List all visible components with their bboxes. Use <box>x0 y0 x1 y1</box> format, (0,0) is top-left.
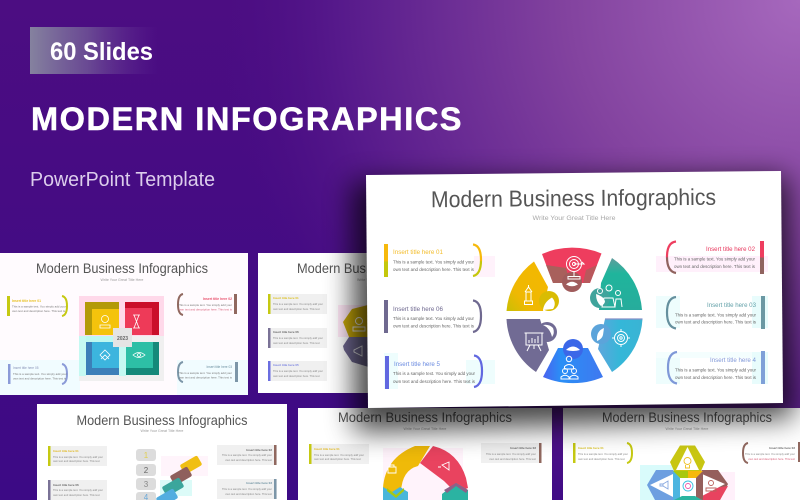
side text items: own text and description here. This text <box>578 457 625 461</box>
item 03: This is a sample text. You simply add your <box>675 312 756 318</box>
text cards <box>48 445 277 500</box>
subheading: PowerPoint Template <box>30 169 215 191</box>
slide thumbnail: quadrant: Modern Business Infographics <box>36 260 208 276</box>
quadrant chart: 2023 <box>117 336 128 342</box>
right item bottom: own text and description here. This text is <box>179 376 233 380</box>
slide thumbnail: numbered list: Write Your Great Title Here <box>141 429 183 433</box>
text cards: This is a sample text. You simply add your <box>53 488 103 492</box>
right item top: This is a sample text. You simply add your <box>178 303 232 307</box>
segment: red <box>542 248 602 292</box>
item 02: own text and description here. This text is <box>674 264 756 270</box>
main slide subtitle: Write Your Great Title Here <box>532 215 616 222</box>
item 05: Insert title here 5 <box>394 361 441 368</box>
left item top: own text and description here. This text is <box>12 309 66 313</box>
numbered steps <box>136 449 156 500</box>
slide thumbnail: numbered list <box>37 404 287 500</box>
gray text cards: This is a sample text. You simply add your <box>273 369 323 373</box>
slide thumbnail: hexagon <box>258 253 469 393</box>
gray text cards: own text and description here. This text <box>273 307 320 311</box>
badge: 60 slides <box>30 27 158 74</box>
numbered steps: 1 <box>144 451 149 460</box>
text cards: Insert title here 06 <box>53 483 79 487</box>
slide thumbnail: quadrant: Write Your Great Title Here <box>101 278 143 282</box>
item 04 <box>656 351 768 384</box>
text cards: own text and description here. This text <box>314 457 361 461</box>
text cards: own text and description here. This text <box>53 493 100 497</box>
item 06: own text and description here. This text is <box>393 324 475 330</box>
side text items: This is a sample text. You simply add your <box>745 452 795 456</box>
gray text cards: Insert title here 06 <box>273 330 299 334</box>
item 03 <box>656 296 768 329</box>
slide thumbnail: ring <box>298 408 552 500</box>
item 03: own text and description here. This text is <box>675 320 757 326</box>
numbered steps: 3 <box>144 480 149 489</box>
slide thumbnail: numbered list: Modern Business Infographics <box>76 412 248 428</box>
text cards: This is a sample text. You simply add your <box>314 453 364 457</box>
slide thumbnail: honeycomb <box>563 408 800 500</box>
right item top: own text and description here. This text is <box>179 308 233 312</box>
tilted tiles <box>156 455 208 500</box>
item 03: Insert title here 03 <box>707 302 757 309</box>
left item top: Insert title here 01 <box>12 299 41 303</box>
text cards: Insert title here 02 <box>246 448 272 452</box>
side text items: Insert title here 01 <box>578 446 604 450</box>
right item bottom: This is a sample text. You simply add your <box>178 371 232 375</box>
gray text cards: own text and description here. This text <box>273 374 320 378</box>
main slide <box>366 171 783 408</box>
item 02: Insert title here 02 <box>706 246 756 253</box>
text cards <box>309 443 542 464</box>
ring segments <box>383 446 468 500</box>
hexagon cluster <box>640 446 735 500</box>
slide thumbnail: hexagon: Modern Business Infographics <box>297 260 469 276</box>
item 01: own text and description here. This text is <box>393 267 475 273</box>
circular diagram <box>506 248 642 383</box>
segment: teal <box>590 258 642 310</box>
side text items: This is a sample text. You simply add your <box>578 452 628 456</box>
left item top: This is a sample text. You simply add your <box>12 304 66 308</box>
numbered steps: 2 <box>144 466 149 475</box>
item 05: This is a sample text. You simply add your <box>393 371 475 377</box>
text cards: This is a sample text. You simply add your <box>222 487 272 491</box>
heading: MODERN INFOGRAPHICS <box>31 101 463 137</box>
segment: cyan <box>591 319 642 372</box>
right item bottom: Insert title here 03 <box>206 365 232 369</box>
main slide shadow <box>352 176 794 432</box>
item 06: This is a sample text. You simply add your <box>393 316 474 322</box>
item 04: This is a sample text. You simply add your <box>675 368 756 374</box>
left item bottom: Insert title here 05 <box>13 366 39 370</box>
item 05: own text and description here. This text is <box>393 379 476 385</box>
slide thumbnail: ring: Modern Business Infographics <box>338 409 512 425</box>
text cards: own text and description here. This text <box>225 492 272 496</box>
text cards: Insert title here 01 <box>53 449 79 453</box>
hexagon segments <box>338 304 372 368</box>
slide thumbnail: ring: Write Your Great Title Here <box>404 427 446 431</box>
quadrant chart <box>79 296 164 381</box>
side text items: Insert title here 02 <box>769 446 795 450</box>
item 01 <box>384 244 495 277</box>
item 01: Insert title here 01 <box>393 249 444 256</box>
item 02: This is a sample text. You simply add your <box>674 256 755 262</box>
side text items: own text and description here. This text <box>748 457 795 461</box>
gray text cards: This is a sample text. You simply add your <box>273 336 323 340</box>
gray text cards: This is a sample text. You simply add your <box>273 302 323 306</box>
left item bottom: This is a sample text. You simply add your <box>13 372 67 376</box>
right item top <box>178 294 237 315</box>
gray text cards: own text and description here. This text <box>273 341 320 345</box>
item 05 <box>384 353 495 389</box>
text cards: own text and description here. This text <box>489 457 536 461</box>
right item bottom <box>177 360 248 395</box>
text cards: Insert title here 01 <box>314 447 340 451</box>
item 04: own text and description here. This text is <box>675 375 757 381</box>
gray text cards: Insert title here 05 <box>273 363 299 367</box>
left item bottom <box>0 360 80 395</box>
item 06: Insert title here 06 <box>393 306 444 313</box>
text cards: own text and description here. This text <box>53 459 100 463</box>
item 02 <box>656 241 768 274</box>
badge: 60 slides: 60 Slides <box>50 38 153 66</box>
text cards: This is a sample text. You simply add your <box>53 455 103 459</box>
slide thumbnail: hexagon: Write Your <box>357 278 374 282</box>
gray text cards: Insert title here 01 <box>273 296 299 300</box>
text cards: Insert title here 02 <box>510 446 536 450</box>
slide thumbnail: quadrant <box>0 253 248 395</box>
text cards: This is a sample text. You simply add your <box>486 452 536 456</box>
item 04: Insert title here 4 <box>710 357 757 364</box>
right item top: Insert title here 02 <box>203 297 232 301</box>
left item bottom: own text and description here. This text is <box>13 376 67 380</box>
segment: yellow <box>506 262 559 311</box>
text cards: Insert title here 03 <box>246 481 272 485</box>
slide thumbnail: honeycomb: Modern Business Infographics <box>602 409 772 425</box>
item 01: This is a sample text. You simply add your <box>393 260 474 266</box>
slide thumbnail: honeycomb: Write Your Great Title Here <box>666 427 708 431</box>
text cards: own text and description here. This text <box>225 458 272 462</box>
segment: blue <box>543 339 603 383</box>
left item top <box>7 296 67 316</box>
segment: purple <box>506 319 557 372</box>
side text items <box>573 442 800 463</box>
text cards: This is a sample text. You simply add your <box>222 453 272 457</box>
gray text cards <box>268 294 327 381</box>
main slide title: Modern Business Infographics <box>431 184 716 212</box>
item 06 <box>384 300 481 333</box>
